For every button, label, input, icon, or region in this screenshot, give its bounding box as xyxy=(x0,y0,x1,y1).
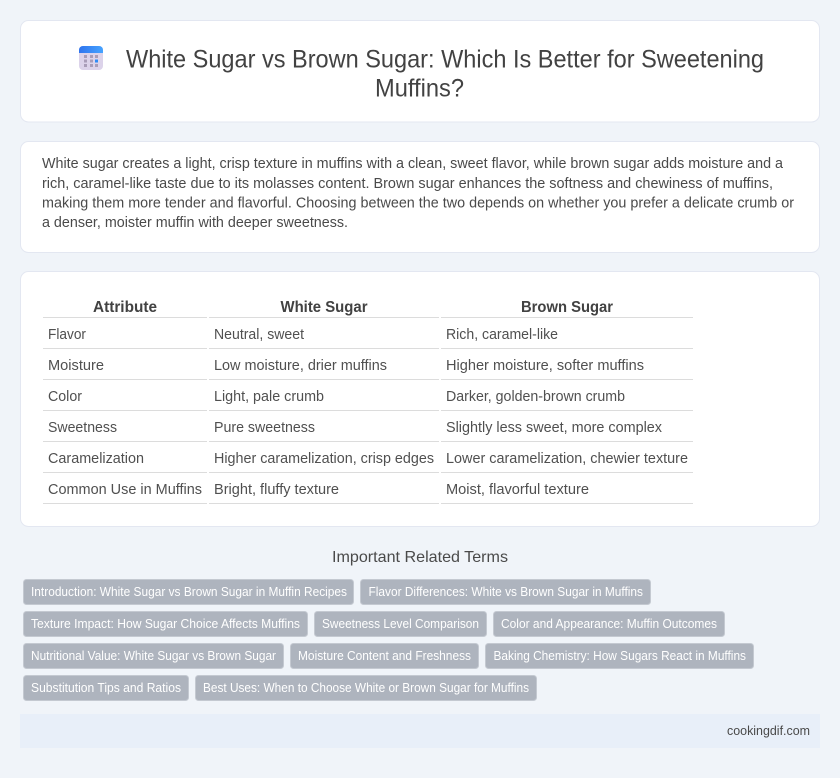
table row: color: Darker, golden-brown crumb xyxy=(446,389,625,405)
table row: moisture: Low moisture, drier muffins xyxy=(214,358,387,374)
tag: Color and Appearance: Muffin Outcomes xyxy=(501,617,717,631)
text block: summary: making them more tender and flavorful. Choosing between the two depends on whether you prefer a delicate crumb or xyxy=(42,196,794,212)
table row: color: Color xyxy=(48,389,82,405)
table grid lines xyxy=(43,318,693,504)
panel: header xyxy=(20,20,820,122)
table row: sweetness: Pure sweetness xyxy=(214,420,315,436)
tag: Flavor Differences: White vs Brown Sugar in Muffins xyxy=(368,585,643,599)
text block: summary: White sugar creates a light, crisp texture in muffins with a clean, sweet flavor, while brown sugar adds moisture and a xyxy=(42,156,784,172)
title xyxy=(126,46,764,102)
table row: common use xyxy=(48,482,589,498)
tag xyxy=(290,644,478,668)
footer xyxy=(20,714,820,748)
tag: Introduction: White Sugar vs Brown Sugar in Muffin Recipes xyxy=(31,585,347,599)
table row: common use: Moist, flavorful texture xyxy=(446,482,589,498)
icon: calendar xyxy=(79,46,103,70)
tag xyxy=(314,612,486,636)
footer: cookingdif.com xyxy=(727,724,810,738)
tag: Substitution Tips and Ratios xyxy=(31,681,181,695)
tag: Baking Chemistry: How Sugars React in Muffins xyxy=(494,649,746,663)
tag: Best Uses: When to Choose White or Brown Sugar for Muffins xyxy=(203,681,529,695)
table row: moisture: Moisture xyxy=(48,358,104,374)
table row: caramelization: Caramelization xyxy=(48,451,144,467)
table header: Brown Sugar xyxy=(521,299,613,316)
tag: Texture Impact: How Sugar Choice Affects Muffins xyxy=(31,617,300,631)
text block: summary: a denser, moister muffin with deeper sweetness. xyxy=(42,215,348,231)
text block: summary xyxy=(42,156,794,231)
tag xyxy=(24,580,354,604)
table header xyxy=(93,299,613,316)
table row: color xyxy=(48,389,625,405)
table row: sweetness xyxy=(48,420,663,436)
table row: flavor xyxy=(48,327,558,343)
table header: White Sugar xyxy=(280,299,368,316)
title: Muffins? xyxy=(375,74,464,102)
table row: moisture: Higher moisture, softer muffins xyxy=(446,358,644,374)
tag: Sweetness Level Comparison xyxy=(322,617,479,631)
heading: related terms: Important Related Terms xyxy=(332,549,508,566)
tag xyxy=(24,676,188,700)
tag xyxy=(360,580,650,604)
table row: caramelization: Higher caramelization, crisp edges xyxy=(214,451,434,467)
tag xyxy=(486,644,754,668)
tag xyxy=(24,612,308,636)
title: White Sugar vs Brown Sugar: Which Is Better for Sweetening xyxy=(126,46,764,74)
table row: flavor: Flavor xyxy=(48,327,86,343)
table row: color: Light, pale crumb xyxy=(214,389,324,405)
table row: sweetness: Slightly less sweet, more complex xyxy=(446,420,663,436)
text block: summary: rich, caramel-like taste due to its molasses content. Brown sugar enhances the softness and chewiness of muffins, xyxy=(42,176,773,192)
panel: summary paragraph xyxy=(20,142,820,252)
tag xyxy=(24,644,284,668)
table row: common use: Common Use in Muffins xyxy=(48,482,202,498)
panel: comparison table xyxy=(20,272,820,526)
tag xyxy=(196,676,536,700)
tag: Moisture Content and Freshness xyxy=(298,649,471,663)
table row: sweetness: Sweetness xyxy=(48,420,117,436)
tag: Nutritional Value: White Sugar vs Brown Sugar xyxy=(31,649,276,663)
table row: moisture xyxy=(48,358,644,374)
table row: common use: Bright, fluffy texture xyxy=(214,482,339,498)
table row: flavor: Neutral, sweet xyxy=(214,327,304,343)
table row: flavor: Rich, caramel-like xyxy=(446,327,558,343)
table header: Attribute xyxy=(93,299,157,316)
table row: caramelization: Lower caramelization, chewier texture xyxy=(446,451,688,467)
related terms tags xyxy=(24,580,754,700)
tag xyxy=(494,612,724,636)
table row: caramelization xyxy=(48,451,688,467)
